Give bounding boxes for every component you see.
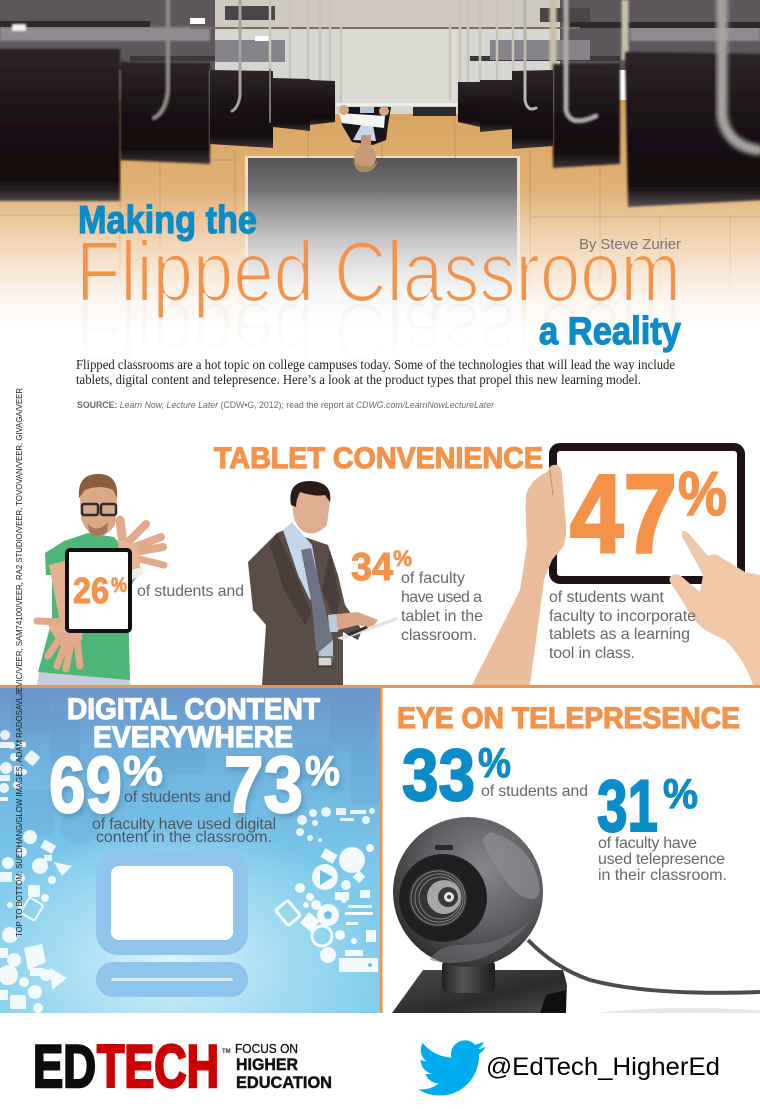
rods and chair frames bbox=[113, 0, 625, 110]
icon: twitter bird bbox=[418, 1040, 486, 1096]
ceiling bbox=[190, 0, 580, 29]
stat: 34% of faculty: have used a bbox=[401, 589, 482, 606]
cable bbox=[528, 940, 760, 993]
neck bbox=[442, 960, 495, 993]
wood floor bbox=[0, 100, 760, 330]
icon cluster: upper right chevron bbox=[296, 807, 375, 842]
text: 47% of students: tool in class. bbox=[549, 645, 635, 662]
large tablet with 47%: % bbox=[678, 460, 727, 529]
tablet with 26%: % bbox=[111, 574, 127, 597]
large tablet with 47%: 47 bbox=[570, 452, 677, 576]
logo: EdTech Focus on Higher Education: FOCUS ON bbox=[235, 1041, 298, 1056]
lens bbox=[399, 854, 487, 942]
photo: student in green shirt bbox=[37, 474, 164, 685]
stat: 34% of faculty: of faculty bbox=[401, 570, 465, 587]
heading: EYE ON TELEPRESENCE bbox=[397, 702, 740, 735]
stat: 33%: % bbox=[478, 739, 511, 786]
stat: 69%: % bbox=[123, 747, 163, 794]
webcam photo bbox=[392, 817, 760, 1036]
presenter, upside down bbox=[339, 105, 391, 172]
twitter handle: @EdTech_HigherEd bbox=[486, 1053, 720, 1081]
stat: 34% of faculty: 34 bbox=[351, 546, 393, 589]
intro text bbox=[76, 357, 675, 387]
faint app icons bbox=[10, 695, 380, 845]
heading bbox=[67, 693, 320, 754]
text: of faculty have used digital content: content in the classroom. bbox=[96, 829, 272, 846]
stat: 34% of faculty: classroom. bbox=[401, 627, 477, 644]
back wall bbox=[190, 29, 580, 114]
text: 47% of students: tablets as a learning bbox=[549, 626, 690, 643]
title: Making the: Making the bbox=[78, 199, 257, 242]
vertical photo credit: TOP TO BOTTOM: SUEDHANG/GLOW IMAGES, ADAM RADOSAVLJEVIC/VEER, SAM74100/VEER, RA2 STUDIO/VEER, TOVOVAN/VEER, GIVAGA/VEER bbox=[14, 388, 24, 937]
base bbox=[392, 970, 567, 1013]
dark chair backs, right bbox=[413, 52, 760, 207]
heading: EVERYWHERE bbox=[93, 721, 293, 754]
text: of faculty have used telepresence bbox=[598, 835, 727, 884]
stat: 73%: 73 bbox=[224, 740, 303, 829]
stat: 34% of faculty: % bbox=[393, 546, 412, 571]
tablet with 26% bbox=[67, 550, 130, 631]
section: tablet convenience bbox=[37, 442, 760, 685]
logo: EdTech Focus on Higher Education: ED bbox=[33, 1033, 96, 1100]
text: of students and: of students and bbox=[137, 583, 244, 600]
intro text: tablets, digital content and telepresence. Here’s a look at the product types that propel this new learning model. bbox=[76, 372, 641, 387]
source line: SOURCE: Learn Now, Lecture Later (CDW•G, 2012); read the report at CDWG.com/LearnNowLectureLater bbox=[77, 400, 495, 411]
text: 47% of students bbox=[549, 589, 696, 662]
table shadow bbox=[570, 1008, 760, 1036]
upper right seating band bbox=[470, 0, 760, 70]
logo: EdTech Focus on Higher Education bbox=[33, 1033, 332, 1100]
heading: DIGITAL CONTENT bbox=[67, 693, 320, 726]
orange divider lines bbox=[0, 685, 760, 1013]
text: 47% of students: faculty to incorporate bbox=[549, 608, 696, 625]
icon cluster: upper left chevron bbox=[0, 730, 40, 801]
panel background bbox=[0, 688, 380, 1013]
stat: 73%: % bbox=[305, 747, 340, 794]
stat: 31%: 31 bbox=[597, 766, 658, 847]
projection screen bbox=[190, 27, 580, 106]
icon: computer monitor bbox=[96, 851, 248, 997]
text: 47% of students: of students want bbox=[549, 589, 665, 606]
icon cluster: left chevron bbox=[0, 830, 72, 1013]
text: of faculty have used telepresence: of faculty have bbox=[598, 835, 697, 852]
heading: TABLET CONVENIENCE bbox=[214, 442, 543, 475]
white fade at the bottom of the photo bbox=[0, 190, 760, 335]
text: of students and: of students and bbox=[481, 783, 588, 800]
logo: EdTech Focus on Higher Education: EDUCATION bbox=[236, 1073, 332, 1092]
logo: EdTech Focus on Higher Education: HIGHER bbox=[236, 1055, 298, 1074]
icon cluster: right chevron bbox=[275, 844, 378, 972]
section: digital content panel bbox=[0, 688, 380, 1013]
text: of faculty have used digital content bbox=[92, 816, 276, 846]
floor seams bbox=[0, 110, 760, 300]
title: a Reality: a Reality bbox=[539, 310, 681, 353]
hero photo: upside-down lecture hall bbox=[0, 0, 760, 430]
stat: 31%: % bbox=[663, 770, 698, 817]
sphere bbox=[393, 817, 543, 967]
title block bbox=[76, 199, 681, 379]
left hand holding tablet bbox=[472, 465, 566, 685]
text: of faculty have used telepresence: in their classroom. bbox=[598, 867, 727, 884]
chair highlights bbox=[113, 0, 758, 170]
conference table bbox=[245, 156, 520, 328]
dark chair backs, left bbox=[0, 49, 335, 201]
intro text: Flipped classrooms are a hot topic on college campuses today. Some of the technologies that will lead the way include bbox=[76, 357, 675, 372]
stat: 69%: 69 bbox=[49, 740, 122, 829]
byline: By Steve Zurier bbox=[579, 236, 681, 253]
upper left seating band bbox=[0, 0, 285, 70]
stat: 33%: 33 bbox=[402, 735, 475, 816]
text: of students and: of students and bbox=[124, 789, 231, 806]
large tablet with 47% bbox=[553, 447, 741, 580]
text: of faculty have used digital content: of faculty have used digital bbox=[92, 816, 276, 833]
section: eye on telepresence bbox=[392, 702, 760, 1036]
photo: faculty member in suit bbox=[248, 481, 398, 685]
background glow bbox=[0, 760, 380, 1013]
stat: 34% of faculty bbox=[351, 546, 483, 644]
text: of faculty have used telepresence: used telepresence bbox=[598, 851, 725, 868]
stat: 34% of faculty: tablet in the bbox=[401, 608, 483, 625]
logo: EdTech Focus on Higher Education: TECH bbox=[97, 1033, 219, 1100]
white footer band bbox=[0, 1013, 760, 1109]
logo: EdTech Focus on Higher Education: TM bbox=[222, 1049, 231, 1055]
right hand pointing bbox=[670, 531, 760, 685]
tablet with 26%: 26 bbox=[73, 570, 109, 611]
